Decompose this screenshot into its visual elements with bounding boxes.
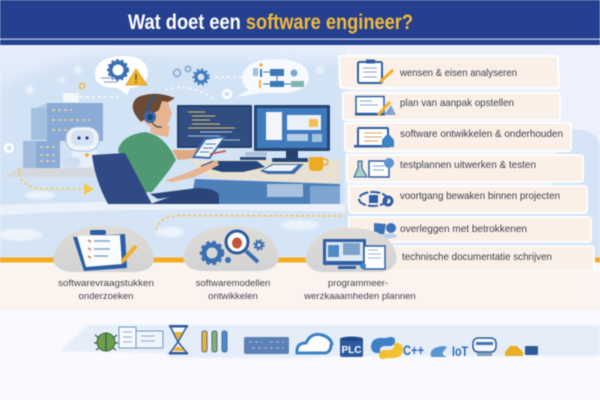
task: software ontwikkelen & onderhouden: software ontwikkelen & onderhouden [400, 128, 563, 140]
coffee mug [309, 157, 328, 171]
caption: softwarevraagstukken onderzoeken: onderzoeken [79, 291, 133, 302]
dome: software questions [53, 226, 154, 272]
left monitor with code [177, 105, 267, 160]
icon: Python [371, 337, 403, 359]
icon: documents [119, 327, 163, 348]
icon: IoT cloud and text [431, 344, 469, 359]
task: technische documentatie schrijven: technische documentatie schrijven [402, 251, 552, 263]
caption: programmeerwerkzaamheden plannen: programmeer- [328, 278, 388, 289]
task: software ontwikkelen & onderhouden [345, 123, 571, 151]
dashed connector: top [80, 77, 245, 100]
dashed arrow [19, 168, 94, 195]
caption: softwaremodellen ontwikkelen: softwaremodellen [196, 278, 270, 289]
task: testplannen uitwerken & testen [347, 155, 583, 182]
caption: programmeerwerkzaamheden plannen: werzkaaamheden plannen [303, 291, 416, 302]
lower cream band right [349, 271, 600, 310]
task: plan van aanpak opstellen [343, 93, 560, 120]
yellow divider line [0, 258, 600, 262]
icon: IoT cloud and text: IoT [452, 344, 469, 359]
bottom tools strip [60, 325, 600, 358]
server rack [23, 93, 103, 168]
task: plan van aanpak opstellen: plan van aanpak opstellen [400, 97, 514, 109]
icon: PLC: PLC [342, 345, 362, 356]
dome: programming tasks [305, 228, 397, 272]
icon: hardware unit [244, 337, 289, 354]
speech bubble: flowchart [236, 59, 309, 97]
icon: bug [94, 333, 118, 351]
task: technische documentatie schrijven [349, 246, 594, 271]
engineer [118, 94, 219, 204]
title: Wat doet een software engineer? [128, 11, 413, 34]
task: wensen & eisen analyseren: wensen & eisen analyseren [399, 67, 517, 79]
illustration background [0, 45, 600, 262]
dome: software models [183, 226, 279, 271]
clipboard in hands [192, 136, 226, 159]
icon: hourglass [169, 325, 188, 354]
dashed connector: yellow [156, 216, 345, 230]
speech bubble: gear and warning [95, 56, 148, 95]
icon: cloud [297, 334, 332, 353]
label: C++: C++ [403, 342, 424, 358]
icon: PLC [340, 336, 363, 357]
lower cream band [0, 263, 349, 310]
icon: chip [525, 346, 538, 355]
robot [63, 127, 100, 168]
task: testplannen uitwerken & testen: testplannen uitwerken & testen [400, 159, 536, 171]
task: voortgang bewaken binnen projecten [349, 186, 587, 213]
icon: test tubes [202, 331, 227, 352]
header banner [0, 0, 600, 45]
task list panels [339, 56, 594, 271]
desk [3, 160, 340, 204]
icon: robot head [473, 338, 496, 356]
office chair [92, 153, 197, 204]
task: overleggen met betrokkenen: overleggen met betrokkenen [400, 223, 527, 235]
caption: softwaremodellen ontwikkelen: ontwikkelen [208, 291, 258, 302]
task: overleggen met betrokkenen [349, 217, 591, 242]
keyboard and tablet on desk [200, 161, 304, 174]
task: voortgang bewaken binnen projecten: voortgang bewaken binnen projecten [400, 190, 560, 202]
right monitor with dashboard [254, 105, 330, 162]
task: wensen & eisen analyseren [339, 56, 559, 88]
floating gears [5, 66, 231, 152]
icon: car [505, 346, 523, 356]
caption: softwarevraagstukken onderzoeken: softwarevraagstukken [58, 278, 154, 289]
